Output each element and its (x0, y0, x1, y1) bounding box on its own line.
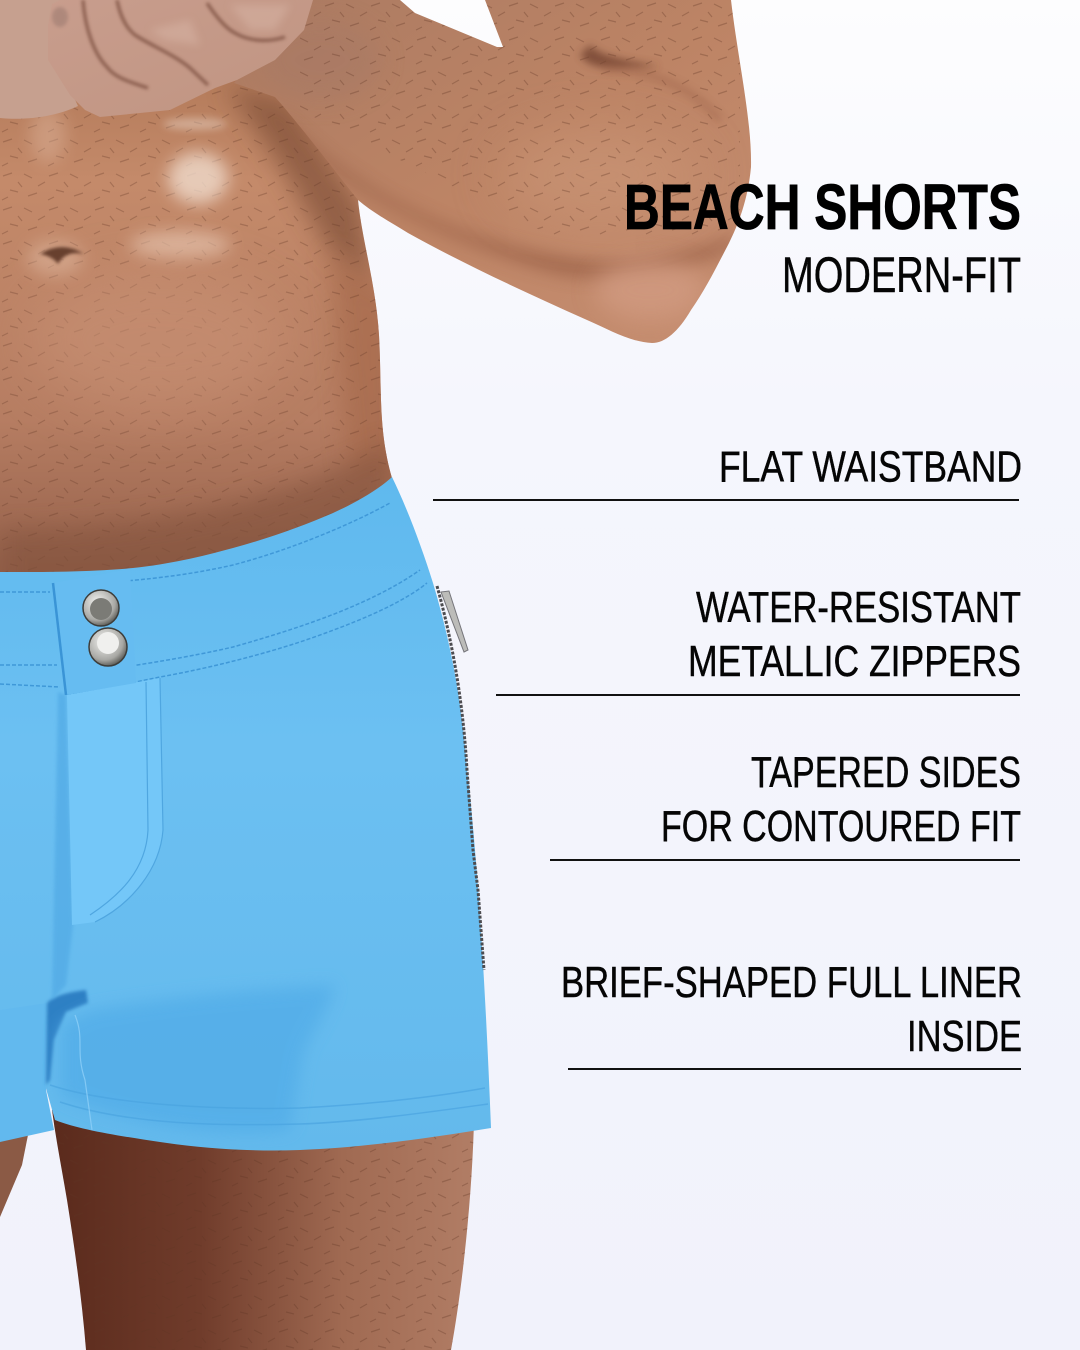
feature: brief-shaped liner (561, 958, 1022, 1070)
navel (40, 247, 84, 264)
feature: brief-shaped liner: INSIDE (907, 1012, 1022, 1061)
feature: tapered sides (550, 748, 1021, 861)
side zipper (437, 586, 484, 970)
leg fold shadow (60, 985, 335, 1133)
shorts (0, 477, 491, 1151)
wrist tone (260, 20, 380, 100)
arm (220, 0, 760, 350)
stubble (2, 88, 386, 572)
arm lower shadow band (312, 140, 732, 283)
lower abdomen glow (30, 270, 290, 410)
abdominal shine (130, 231, 230, 259)
bottom snap button (89, 628, 127, 666)
knuckle highlights (150, 5, 290, 45)
chest fragment (0, 0, 78, 119)
left short leg (0, 1000, 54, 1142)
tab edge (53, 583, 66, 695)
left leg (0, 1130, 29, 1217)
upper chest shine (163, 118, 227, 130)
under-arm shadow (225, 85, 372, 290)
side shade (329, 268, 392, 477)
hem stitching (50, 1085, 488, 1125)
left shine (30, 107, 66, 163)
left fly shadow (52, 692, 73, 1000)
upper arm fold (632, 72, 720, 119)
feature: metallic zippers (496, 583, 1021, 696)
top snap button (83, 590, 119, 626)
torso (0, 80, 392, 572)
shorts body (0, 477, 491, 1151)
fingernail (52, 7, 68, 27)
inner elbow crease (580, 45, 660, 68)
fly placket (67, 678, 163, 925)
navel glow (27, 240, 83, 276)
crotch shadow (46, 990, 88, 1085)
forearm highlight (540, 153, 648, 193)
zipper pull (441, 591, 468, 652)
elbow highlight (595, 260, 705, 320)
waist shadow (2, 446, 392, 572)
finger creases (83, 0, 285, 88)
fly stitching (90, 678, 163, 922)
hand (48, 0, 313, 117)
right leg (50, 1100, 480, 1350)
forearm hair (300, 0, 740, 240)
waistband stitching (0, 503, 427, 695)
chest shine (168, 152, 228, 204)
inseam stitching (75, 1015, 92, 1130)
model figure (0, 0, 760, 1350)
waistband tab (53, 569, 136, 695)
title block (624, 171, 1021, 303)
